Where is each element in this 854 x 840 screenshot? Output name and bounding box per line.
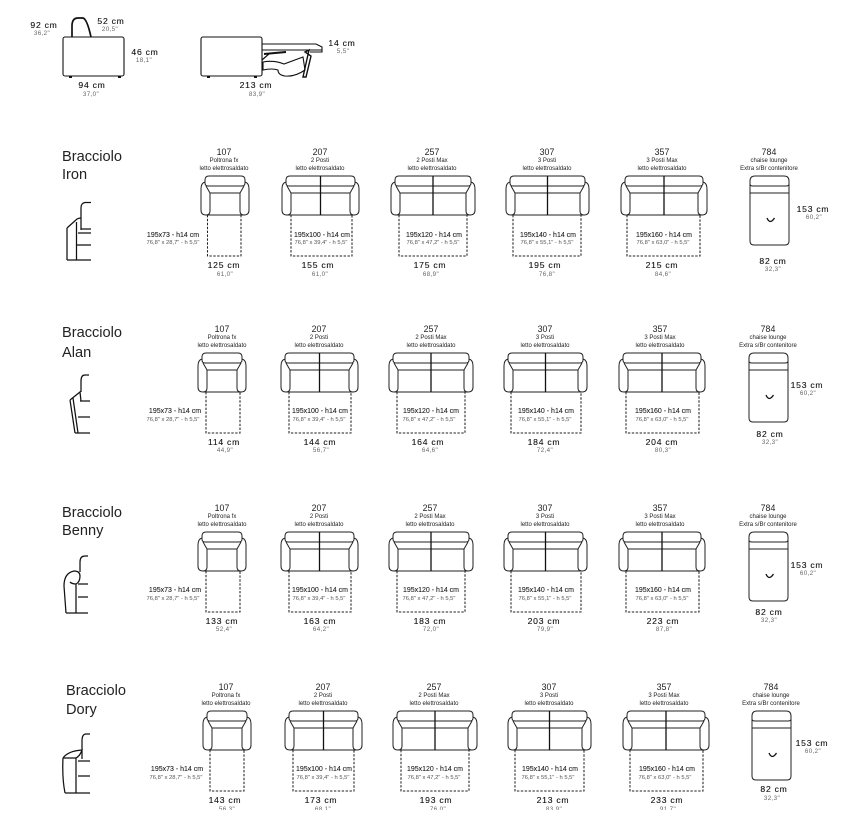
unit 257: 2 Posti Max	[418, 693, 450, 699]
unit 307: 79,9"	[537, 626, 553, 633]
unit 357	[623, 682, 709, 813]
unit 357: 76,8" x 63,0" - h 5,5"	[637, 240, 689, 246]
label: length 213 cm: 213 cm	[240, 80, 272, 90]
unit 357: 76,8" x 63,0" - h 5,5"	[639, 775, 691, 781]
unit 784 chaise: 60,2"	[805, 748, 821, 755]
unit 207: 195x100 - h14 cm	[296, 766, 352, 773]
unit 784 chaise: 60,2"	[800, 570, 816, 577]
unit 107: 107	[217, 147, 231, 157]
icon: Iron arm profile	[67, 202, 91, 260]
unit 257: 195x120 - h14 cm	[406, 232, 462, 239]
unit 207: 207	[313, 147, 327, 157]
unit 207: letto elettrosaldato	[294, 522, 344, 528]
side view: sofa closed	[30, 16, 159, 98]
label: seat height 46 cm	[131, 47, 159, 64]
unit 257: 2 Posti Max	[415, 335, 447, 341]
heading: Bracciolo Iron	[62, 149, 122, 183]
unit 784 chaise: 32,3"	[762, 439, 778, 446]
unit 207: 195x100 - h14 cm	[292, 587, 348, 594]
side view: sofa open with bed	[201, 37, 356, 98]
unit 307	[504, 503, 587, 633]
unit 784 chaise: 784	[761, 324, 775, 334]
unit 257: 257	[424, 324, 438, 334]
icon: Dory arm profile	[63, 734, 90, 793]
unit 257: letto elettrosaldato	[405, 522, 455, 528]
unit 784 chaise: chaise lounge	[752, 693, 790, 699]
unit 357: 195x160 - h14 cm	[636, 232, 692, 239]
unit 107: letto elettrosaldato	[201, 701, 251, 707]
label: depth 52 cm: 52 cm	[97, 16, 125, 26]
unit 257	[393, 682, 477, 813]
unit 357	[619, 503, 705, 633]
unit 357: letto elettrosaldato	[637, 166, 687, 172]
unit 107	[147, 324, 247, 454]
unit 207: 195x100 - h14 cm	[292, 408, 348, 415]
unit 257: 175 cm	[414, 260, 446, 270]
unit 107: 52,4"	[216, 626, 232, 633]
unit 207: 173 cm	[305, 795, 337, 805]
heading: Bracciolo Alan	[62, 325, 122, 361]
unit 307: 3 Posti	[536, 335, 554, 341]
unit 107: 107	[215, 503, 229, 513]
unit 357: 357	[653, 324, 667, 334]
unit 357: 76,8" x 63,0" - h 5,5"	[636, 417, 688, 423]
unit 307: 76,8" x 55,1" - h 5,5"	[521, 240, 573, 246]
unit 784 chaise: 82 cm	[760, 784, 788, 794]
label: mattress height 14 cm	[328, 38, 356, 55]
unit 107: 76,8" x 28,7" - h 5,5"	[150, 775, 202, 781]
unit 257: 76,8" x 47,2" - h 5,5"	[403, 596, 455, 602]
unit 107: 44,9"	[217, 447, 233, 454]
unit 107: 76,8" x 28,7" - h 5,5"	[147, 417, 199, 423]
unit 357: 84,6"	[655, 271, 671, 278]
unit 207	[281, 324, 358, 454]
unit 207: 56,7"	[313, 447, 329, 454]
unit 357: 87,8"	[656, 626, 672, 633]
unit 307: letto elettrosaldato	[520, 522, 570, 528]
unit 107: 195x73 - h14 cm	[149, 408, 201, 415]
unit 307: 213 cm	[537, 795, 569, 805]
unit 784 chaise: 153 cm	[791, 560, 823, 570]
unit 784 chaise	[742, 682, 828, 802]
label: height 92 cm: 36,2"	[34, 30, 50, 37]
unit 107: 61,0"	[217, 271, 233, 278]
unit 257: 195x120 - h14 cm	[403, 587, 459, 594]
heading: Bracciolo Benny	[62, 505, 122, 539]
unit 357: 357	[655, 147, 669, 157]
unit 357	[621, 147, 707, 278]
unit 357: 3 Posti Max	[646, 158, 678, 164]
unit 257: 68,9"	[423, 271, 439, 278]
unit 784 chaise	[740, 147, 829, 273]
unit 307: 76,8" x 55,1" - h 5,5"	[519, 596, 571, 602]
unit 257: 76,8" x 47,2" - h 5,5"	[407, 240, 459, 246]
unit 307: 195x140 - h14 cm	[518, 587, 574, 594]
unit 784 chaise: 60,2"	[800, 390, 816, 397]
label: depth 94 cm	[78, 80, 106, 98]
row: Bracciolo Iron	[62, 147, 829, 278]
unit 357: 3 Posti Max	[648, 693, 680, 699]
unit 207: 144 cm	[304, 437, 336, 447]
unit 207: 163 cm	[304, 616, 336, 626]
unit 257	[389, 503, 473, 633]
unit 784 chaise: Extra s/Br contenitore	[739, 522, 798, 528]
icon: Alan arm profile	[70, 375, 90, 433]
unit 257: 72,0"	[423, 626, 439, 633]
unit 307: 195x140 - h14 cm	[520, 232, 576, 239]
unit 307: 307	[542, 682, 556, 692]
unit 784 chaise	[739, 503, 823, 624]
unit 784 chaise: 32,3"	[765, 266, 781, 273]
unit 357: 357	[653, 503, 667, 513]
unit 107: 76,8" x 28,7" - h 5,5"	[147, 596, 199, 602]
label: length 213 cm	[240, 80, 272, 98]
unit 307: 76,8" x 55,1" - h 5,5"	[519, 417, 571, 423]
unit 307: 195x140 - h14 cm	[518, 408, 574, 415]
unit 257: letto elettrosaldato	[407, 166, 457, 172]
unit 107: Poltrona fx	[208, 335, 236, 341]
unit 107: 133 cm	[206, 616, 238, 626]
unit 207	[282, 147, 359, 278]
unit 784 chaise: chaise lounge	[750, 158, 788, 164]
unit 784 chaise: 32,3"	[764, 795, 780, 802]
unit 307: letto elettrosaldato	[522, 166, 572, 172]
unit 107: letto elettrosaldato	[197, 343, 247, 349]
unit 107	[147, 147, 249, 278]
unit 207: 68,1"	[315, 806, 331, 813]
unit 257	[391, 147, 475, 278]
unit 107: 107	[219, 682, 233, 692]
unit 207: letto elettrosaldato	[295, 166, 345, 172]
label: height 92 cm: 92 cm	[30, 20, 58, 30]
unit 257: 257	[423, 503, 437, 513]
label: seat height 46 cm: 18,1"	[136, 57, 152, 64]
unit 207: 2 Posti	[314, 693, 332, 699]
unit 784 chaise	[739, 324, 823, 446]
unit 257: 64,6"	[422, 447, 438, 454]
label: height 92 cm	[30, 20, 58, 37]
unit 784 chaise: 82 cm	[756, 429, 784, 439]
unit 307	[504, 324, 587, 454]
row: Bracciolo Benny	[62, 503, 823, 633]
unit 784 chaise: 153 cm	[796, 738, 828, 748]
unit 357: 357	[657, 682, 671, 692]
unit 784 chaise: Extra s/Br contenitore	[740, 166, 799, 172]
unit 307: 307	[538, 503, 552, 513]
label: mattress height 14 cm: 14 cm	[328, 38, 356, 48]
unit 257: 76,8" x 47,2" - h 5,5"	[408, 775, 460, 781]
unit 357: 223 cm	[647, 616, 679, 626]
unit 257: 2 Posti Max	[414, 514, 446, 520]
unit 207: 64,2"	[313, 626, 329, 633]
label: depth 52 cm: 20,5"	[102, 26, 118, 33]
unit 207: 76,8" x 39,4" - h 5,5"	[293, 596, 345, 602]
unit 107: Poltrona fx	[208, 514, 236, 520]
unit 357: 215 cm	[646, 260, 678, 270]
unit 307: 3 Posti	[540, 693, 558, 699]
heading: Bracciolo Alan: Alan	[62, 345, 91, 361]
unit 107: 114 cm	[208, 437, 240, 447]
unit 307: 195 cm	[529, 260, 561, 270]
unit 784 chaise: 784	[761, 503, 775, 513]
unit 784 chaise: Extra s/Br contenitore	[739, 343, 798, 349]
heading: Bracciolo Iron: Bracciolo	[62, 149, 122, 165]
heading: Bracciolo Alan: Bracciolo	[62, 325, 122, 341]
unit 784 chaise: 153 cm	[791, 380, 823, 390]
icon: sofa with bed mechanism	[201, 37, 322, 78]
unit 107: Poltrona fx	[210, 158, 238, 164]
row: Bracciolo Alan	[62, 324, 823, 454]
unit 107	[150, 682, 251, 813]
unit 307: 3 Posti	[536, 514, 554, 520]
unit 207: 2 Posti	[310, 335, 328, 341]
label: length 213 cm: 83,9"	[249, 91, 265, 98]
icon: Benny arm profile	[64, 556, 88, 613]
label: depth 94 cm: 37,0"	[83, 91, 99, 98]
unit 207: 207	[312, 324, 326, 334]
unit 107: 195x73 - h14 cm	[151, 766, 203, 773]
unit 107: 56,3"	[219, 806, 235, 813]
heading: Bracciolo Dory: Bracciolo	[66, 683, 126, 699]
unit 257: 195x120 - h14 cm	[407, 766, 463, 773]
unit 257: letto elettrosaldato	[409, 701, 459, 707]
unit 257: 195x120 - h14 cm	[403, 408, 459, 415]
unit 357: letto elettrosaldato	[635, 343, 685, 349]
unit 357: 76,8" x 63,0" - h 5,5"	[636, 596, 688, 602]
heading: Bracciolo Iron: Iron	[62, 167, 87, 183]
icon: sofa closed profile	[63, 18, 124, 78]
unit 784 chaise: 784	[762, 147, 776, 157]
unit 107: Poltrona fx	[212, 693, 240, 699]
unit 307: 3 Posti	[538, 158, 556, 164]
label: depth 94 cm: 94 cm	[78, 80, 106, 90]
unit 357	[619, 324, 705, 454]
unit 357: 91,7"	[660, 806, 676, 813]
unit 207: 207	[316, 682, 330, 692]
unit 307: 76,8"	[539, 271, 555, 278]
label: seat height 46 cm: 46 cm	[131, 47, 159, 57]
unit 357: letto elettrosaldato	[639, 701, 689, 707]
unit 784 chaise: 32,3"	[761, 617, 777, 624]
unit 357: 195x160 - h14 cm	[635, 587, 691, 594]
heading: Bracciolo Dory	[66, 683, 126, 718]
unit 207	[285, 682, 362, 813]
unit 357: 204 cm	[646, 437, 678, 447]
unit 357: 233 cm	[651, 795, 683, 805]
unit 784 chaise: Extra s/Br contenitore	[742, 701, 801, 707]
unit 357: 195x160 - h14 cm	[639, 766, 695, 773]
unit 784 chaise: 82 cm	[755, 607, 783, 617]
unit 257: 76,0"	[430, 806, 446, 813]
unit 257: 257	[425, 147, 439, 157]
unit 307: letto elettrosaldato	[520, 343, 570, 349]
unit 784 chaise: 784	[764, 682, 778, 692]
unit 207: 195x100 - h14 cm	[294, 232, 350, 239]
unit 207: 61,0"	[312, 271, 328, 278]
unit 307: 203 cm	[528, 616, 560, 626]
unit 307	[508, 682, 591, 813]
unit 207: 2 Posti	[311, 158, 329, 164]
label: depth 52 cm	[97, 16, 125, 33]
unit 107: 195x73 - h14 cm	[147, 232, 199, 239]
unit 207: 76,8" x 39,4" - h 5,5"	[295, 240, 347, 246]
unit 784 chaise: 153 cm	[797, 204, 829, 214]
unit 784 chaise: chaise lounge	[749, 335, 787, 341]
unit 784 chaise: 82 cm	[759, 256, 787, 266]
unit 307: letto elettrosaldato	[524, 701, 574, 707]
label: mattress height 14 cm: 5,5"	[337, 48, 349, 55]
unit 257: 257	[427, 682, 441, 692]
unit 357: 80,3"	[655, 447, 671, 454]
unit 207: 155 cm	[302, 260, 334, 270]
unit 207: 207	[312, 503, 326, 513]
unit 207: letto elettrosaldato	[294, 343, 344, 349]
unit 107: 195x73 - h14 cm	[149, 587, 201, 594]
unit 357: 3 Posti Max	[644, 335, 676, 341]
heading: Bracciolo Benny: Benny	[62, 523, 104, 539]
unit 207: letto elettrosaldato	[298, 701, 348, 707]
heading: Bracciolo Benny: Bracciolo	[62, 505, 122, 521]
unit 307: 83,9"	[546, 806, 562, 813]
unit 257: letto elettrosaldato	[406, 343, 456, 349]
unit 357: 195x160 - h14 cm	[635, 408, 691, 415]
unit 207: 2 Posti	[310, 514, 328, 520]
unit 257: 193 cm	[420, 795, 452, 805]
unit 307: 76,8" x 55,1" - h 5,5"	[522, 775, 574, 781]
unit 307: 307	[538, 324, 552, 334]
unit 784 chaise: chaise lounge	[749, 514, 787, 520]
unit 307: 184 cm	[528, 437, 560, 447]
unit 307: 195x140 - h14 cm	[522, 766, 578, 773]
unit 257: 2 Posti Max	[416, 158, 448, 164]
unit 307	[506, 147, 589, 278]
unit 307: 307	[540, 147, 554, 157]
unit 107: 143 cm	[209, 795, 241, 805]
heading: Bracciolo Dory: Dory	[66, 702, 98, 718]
unit 257: 76,8" x 47,2" - h 5,5"	[403, 417, 455, 423]
unit 784 chaise: 60,2"	[806, 214, 822, 221]
unit 357: letto elettrosaldato	[635, 522, 685, 528]
unit 207: 76,8" x 39,4" - h 5,5"	[297, 775, 349, 781]
unit 257	[389, 324, 473, 454]
unit 257: 164 cm	[412, 437, 444, 447]
unit 107: letto elettrosaldato	[197, 522, 247, 528]
unit 107	[147, 503, 247, 633]
unit 257: 183 cm	[414, 616, 446, 626]
unit 357: 3 Posti Max	[644, 514, 676, 520]
row: Bracciolo Dory	[63, 682, 828, 813]
unit 207: 76,8" x 39,4" - h 5,5"	[293, 417, 345, 423]
unit 107: 76,8" x 28,7" - h 5,5"	[147, 240, 199, 246]
unit 307: 72,4"	[537, 447, 553, 454]
unit 207	[281, 503, 358, 633]
unit 107: 107	[215, 324, 229, 334]
unit 107: letto elettrosaldato	[199, 166, 249, 172]
unit 107: 125 cm	[208, 260, 240, 270]
